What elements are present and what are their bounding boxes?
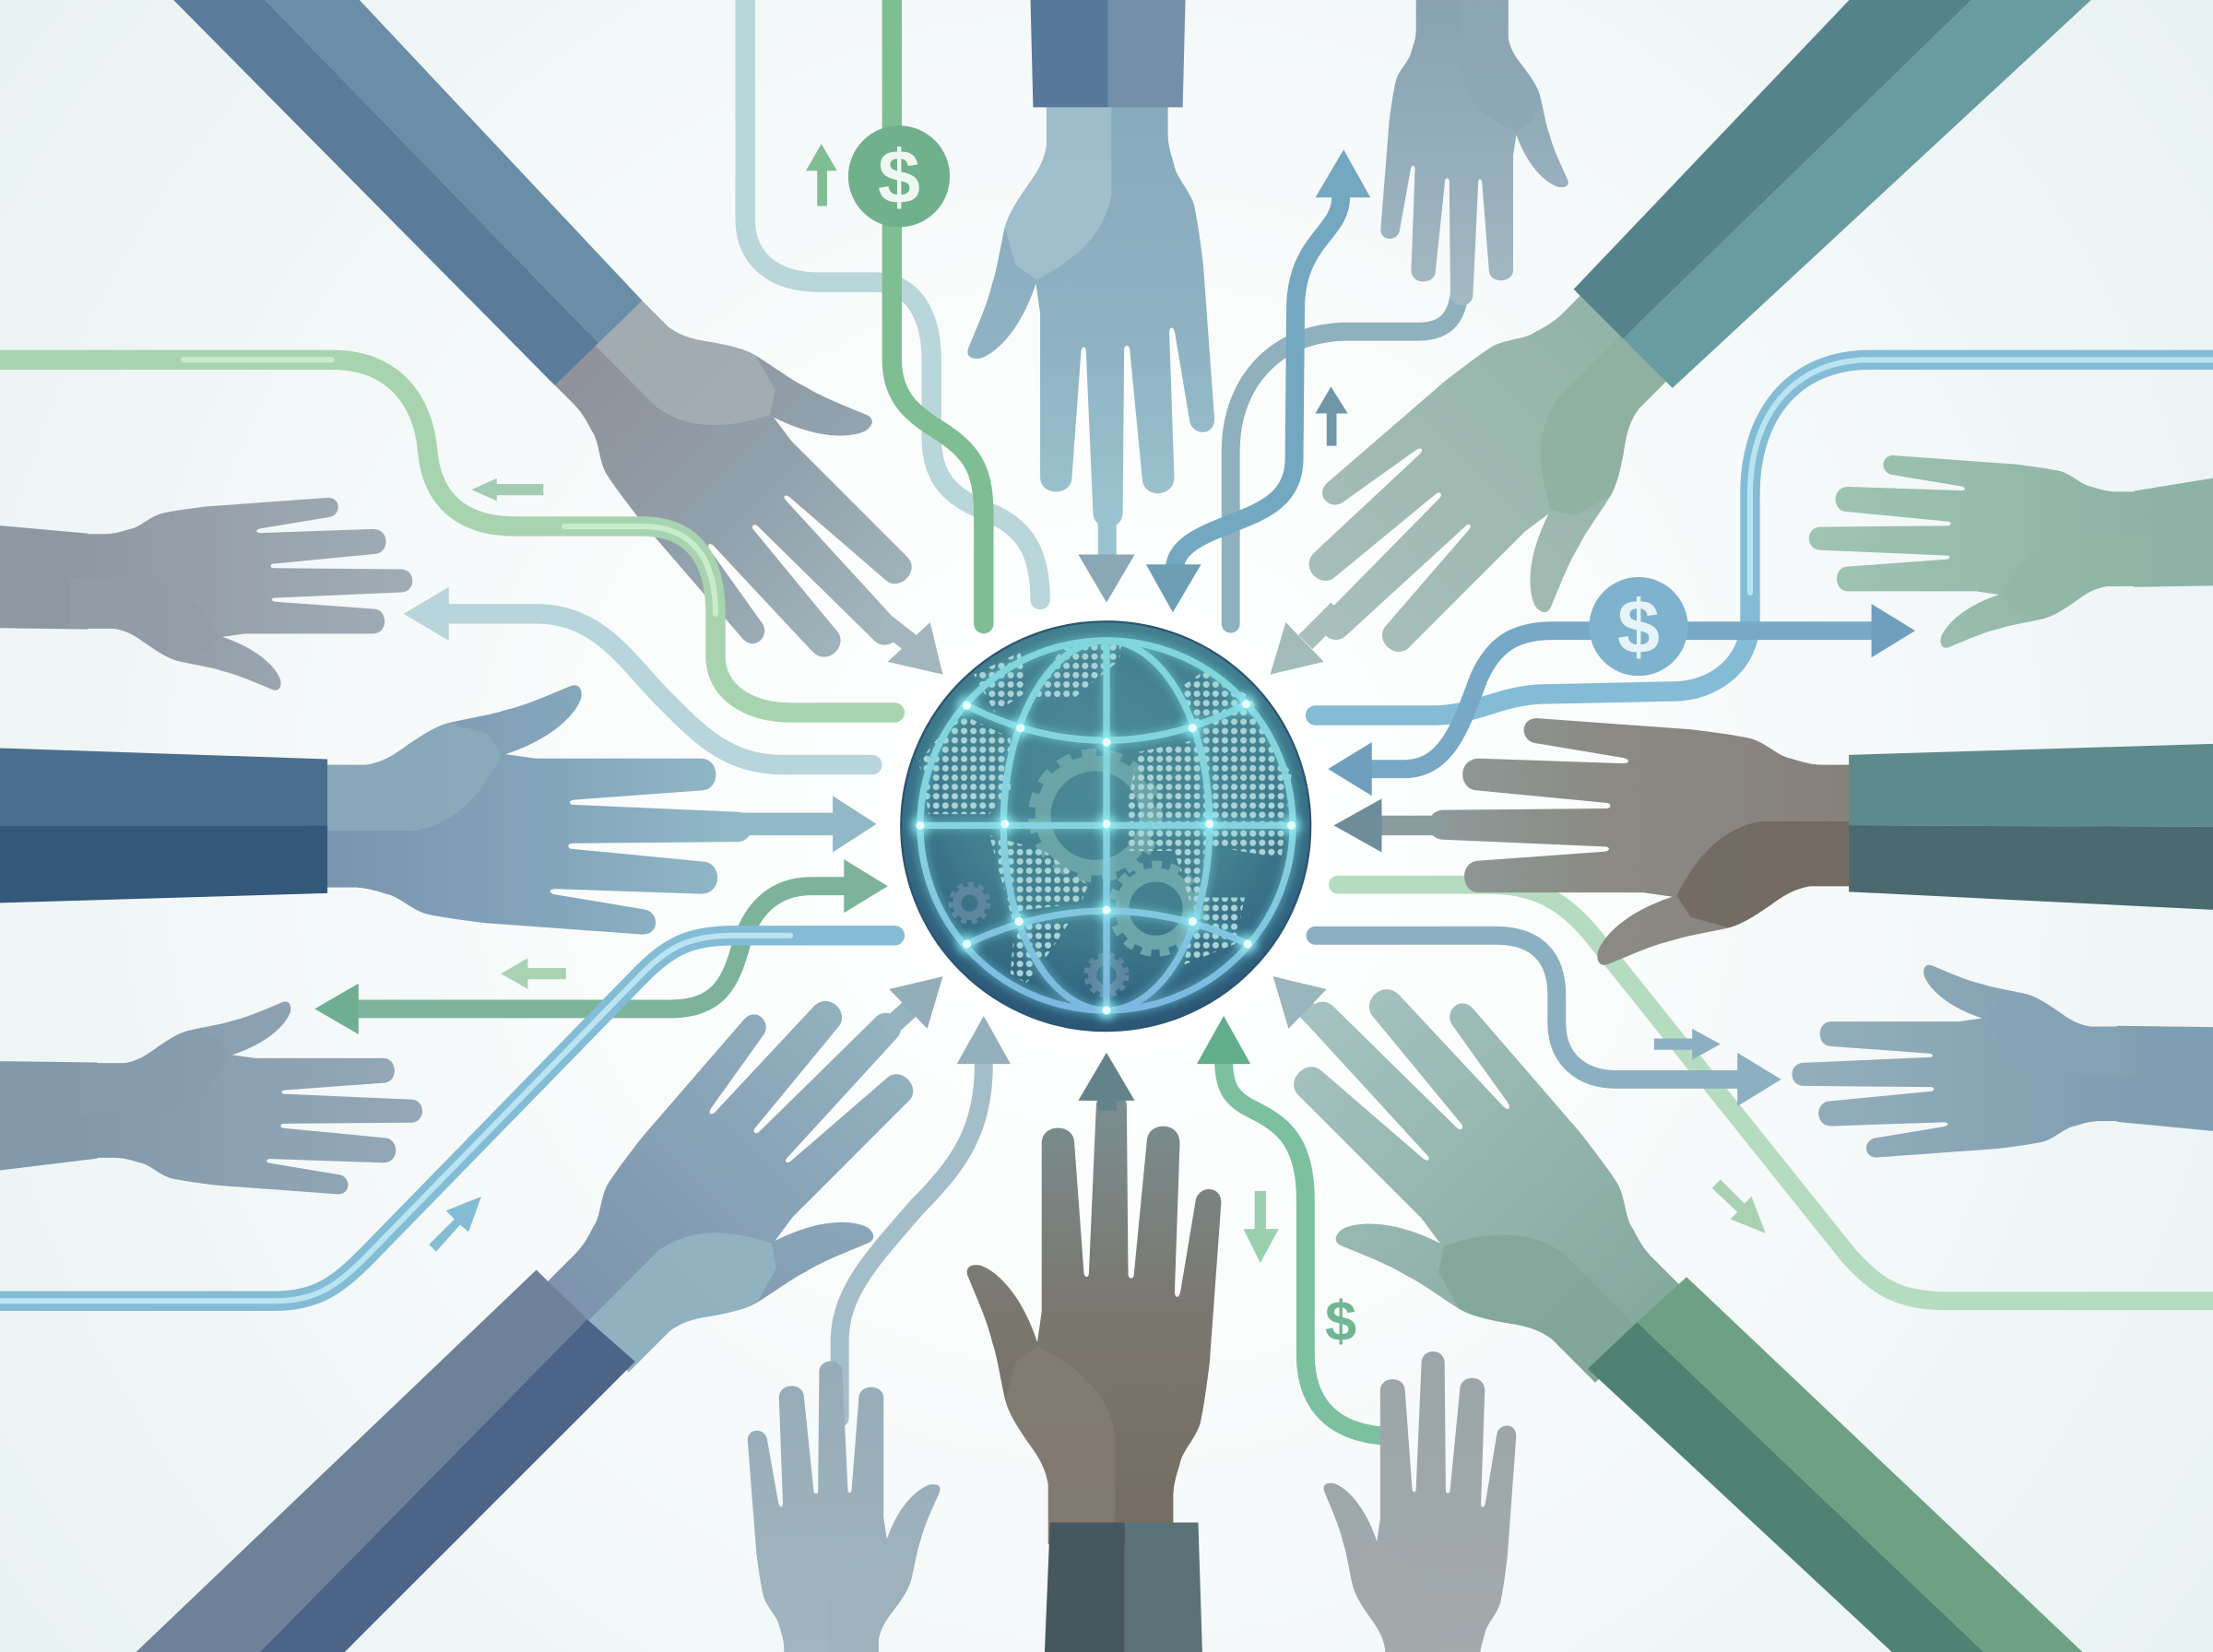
flow: green line from top [892,0,984,624]
sleeve: left [0,748,327,903]
arrowhead: bottom slate [957,1016,1011,1064]
hand: bottom [967,1092,1221,1544]
small arrow: up green [806,144,837,206]
arrowhead: top right up [1316,149,1370,197]
hand: top right [1250,249,1735,735]
flow lines: top [745,0,1461,624]
small arrow: up slate [1316,386,1348,446]
dollar sign: small green: $ [1325,1290,1356,1352]
arrow: bottom center into globe [1078,1053,1135,1111]
arrowhead: right green toward globe [844,859,888,913]
flow: slate line to lower right arrow [1316,936,1743,1080]
arrowhead: left green [314,984,359,1034]
glowing nodes [912,696,1300,1019]
dollar badge: blue: $ [1617,584,1660,670]
arrowhead: bottom green [1197,1016,1250,1064]
sleeve: right [1849,744,2213,910]
arrowhead: blue toward globe [1328,742,1372,796]
sleeve: bottom [1045,1523,1202,1652]
dollar badge: green [848,125,950,227]
flow: blue arrow line through dollar [1369,631,1877,769]
flow: top right slate line [1231,275,1461,624]
flow: blue line from lower left edge to globe [0,936,894,1301]
globe body [901,621,1310,1031]
flow: top right blue line with double arrows [1174,197,1341,572]
arrowhead: top right down [1146,564,1201,612]
gear: lower right [1112,865,1200,952]
sleeve: bottom left [130,1270,635,1652]
small arrow: down green [1243,1191,1279,1263]
flow: pale line to upper left arrow [437,614,872,765]
hand: top left [509,230,994,715]
arrow: bottom left diagonal into globe [886,976,942,1030]
hand: left [307,685,751,935]
hand: left upper small [0,498,412,690]
small arrow: right slate [1654,1029,1721,1059]
flow: pale green line to lower right edge [1338,885,2213,1301]
gear: large center [1033,753,1157,878]
arrowhead: far right blue [1872,604,1915,657]
sleeve: bottom right [1588,1277,2089,1652]
sleeve: top right [1574,0,2099,388]
hand: bottom left small [748,1361,941,1652]
hand: right upper small [1809,455,2213,648]
hand: right lower small [1793,965,2213,1158]
arrow: top right diagonal into globe [1271,609,1338,675]
arrow: left into globe [732,796,877,852]
arrow: right into globe [1333,798,1447,852]
flow: pale slate line to globe bottom [840,1066,984,1418]
hand: right [1428,718,1869,965]
hand: top right small [1380,0,1568,305]
dollar badge: blue [1589,577,1688,676]
flow: blue line from right edge to globe [1316,360,2213,715]
flow lines: left side [0,614,894,1301]
grid glow [920,641,1293,1010]
globe halo [895,616,1316,1036]
arrow: bottom right diagonal into globe [1273,976,1327,1029]
globe [895,616,1316,1036]
arrowhead: lower right slate [1737,1053,1781,1106]
flow lines: right side [1316,360,2213,1301]
arrow: top center into globe [1078,511,1135,603]
hand: bottom right small [1324,1351,1516,1652]
sleeve: top [1030,0,1186,107]
small arrow: left green upper [471,478,543,501]
flow: pale line from top [745,0,1040,600]
hand: top [967,88,1214,527]
flow: green line to globe bottom [1224,1058,1397,1436]
dotted continents [918,639,1292,984]
hand: bottom left [510,942,996,1428]
dollar badge: green: $ [878,134,920,219]
hand: bottom right [1206,926,1722,1442]
flow: green line from top left edge to globe [0,360,894,713]
sleeve: top left [167,0,642,385]
small arrow: blue diagonal [429,1197,481,1252]
gear: lower left [952,885,988,921]
arrow: top left diagonal into globe [882,620,942,675]
hand: left lower small [0,1002,422,1194]
arrowhead: upper left pale [404,587,449,641]
small arrow: green diagonal [1712,1180,1766,1233]
flow: green line with two arrow directions [353,886,846,1009]
grid lines [920,641,1293,1010]
small arrow: left light green [501,958,566,989]
gear: bottom [1087,955,1126,995]
flow lines: bottom [840,1058,1397,1436]
gears [952,753,1200,995]
